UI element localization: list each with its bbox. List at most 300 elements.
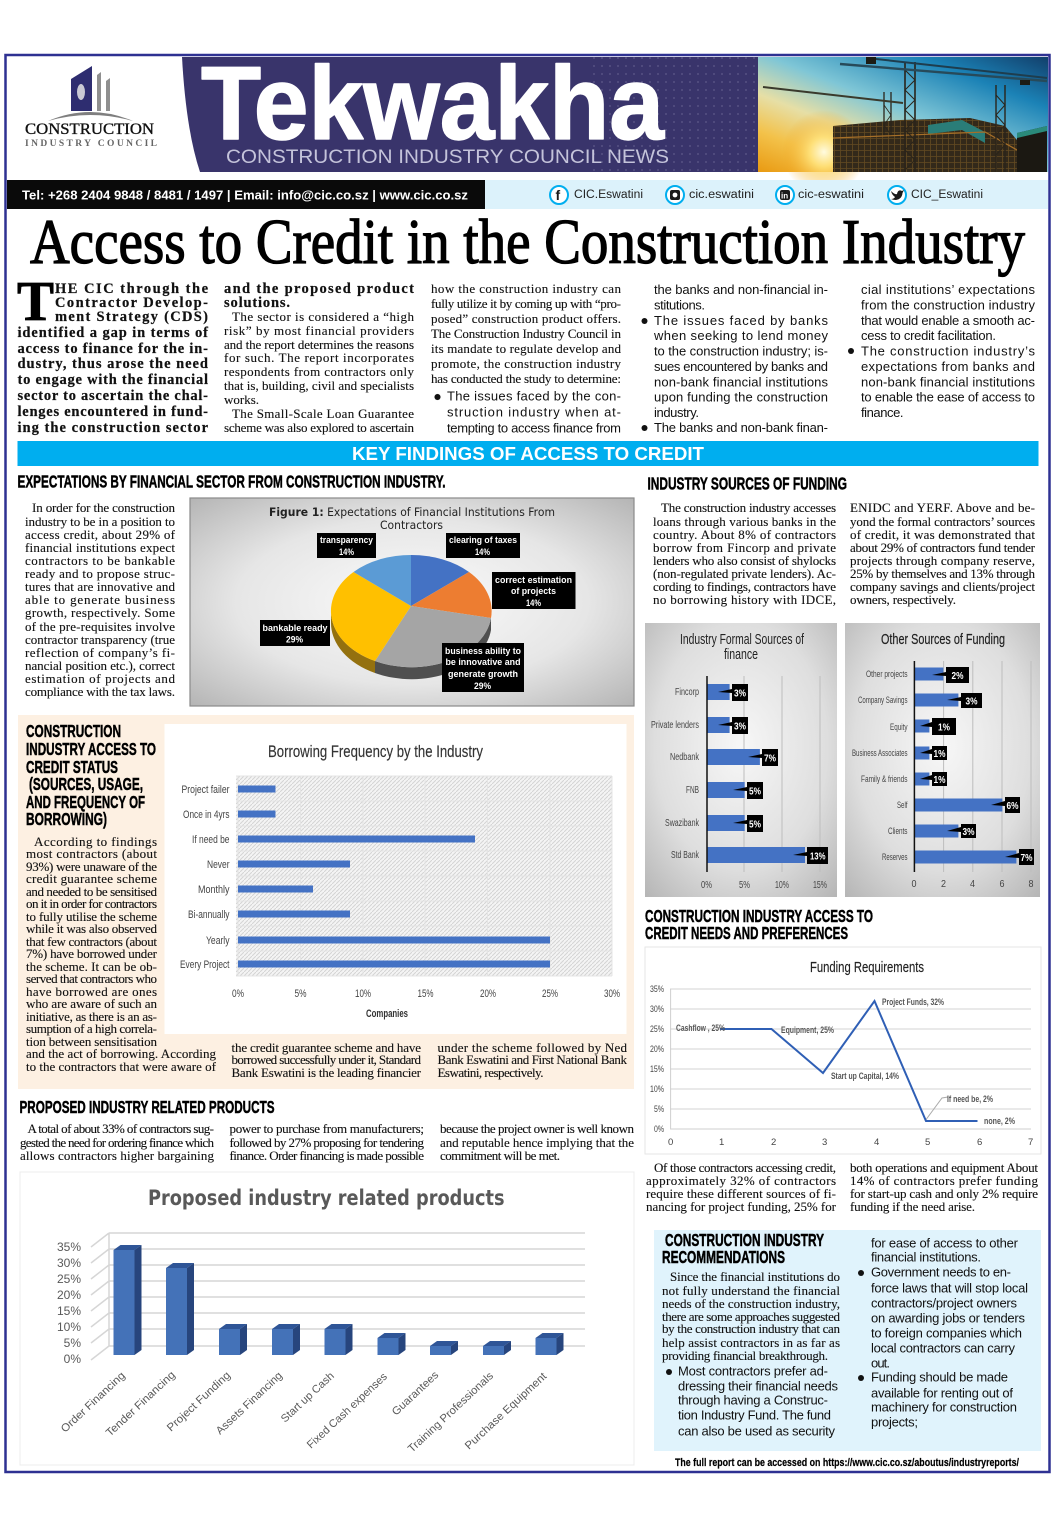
- data labels: Start up Capital, 14%: [831, 1071, 899, 1082]
- text block: 7%) have borrowed under: [26, 946, 158, 961]
- value callouts: 1%: [934, 775, 946, 786]
- category labels: Once in 4yrs: [183, 809, 230, 821]
- recommendation bullets right: to foreign companies which: [871, 1326, 1022, 1340]
- icon: instagram: [666, 186, 684, 204]
- social media bar: cic.eswatini: [689, 189, 754, 201]
- bar chart: other sources of funding: Other Sources of Funding: [881, 631, 1005, 648]
- bullet: [434, 394, 440, 400]
- text block: to the contractors that were aware of: [26, 1059, 217, 1074]
- data label: transparency: 14%: [339, 547, 354, 557]
- intro column 1: [17, 271, 209, 436]
- category labels: Tender Financing: [104, 1369, 178, 1439]
- axis labels: 30%: [604, 988, 620, 1000]
- heading: credit needs and preferences: CREDIT NEEDS AND PREFERENCES: [645, 923, 848, 943]
- intro column 4: The issues faced by banks: [654, 313, 828, 328]
- social media bar: CIC.Eswatini: [574, 189, 643, 201]
- heading: proposed industry related products: PROPOSED INDUSTRY RELATED PRODUCTS: [20, 1097, 274, 1117]
- panel: recommendations: [654, 1230, 1041, 1451]
- social media bar: cic-eswatini: [798, 189, 864, 201]
- value callouts: 6%: [1006, 801, 1019, 812]
- heading: BORROWING): [26, 809, 107, 829]
- icon: twitter: [888, 186, 906, 204]
- text block: served that contractors who: [26, 971, 157, 986]
- labels: Self: [897, 800, 908, 810]
- value callouts: 7%: [764, 754, 776, 764]
- text: proposed products: commitment will be met.: [440, 1148, 560, 1163]
- text block: under the scheme followed by Ned: [438, 1040, 628, 1055]
- intro column 4: sues encountered by banks and: [654, 359, 828, 374]
- chart title: [269, 505, 555, 532]
- text: credit needs: nancing for project funding, 25% for: [646, 1199, 837, 1214]
- y axis labels: [57, 1240, 81, 1366]
- axes labels: 35%: [650, 984, 664, 995]
- recommendation bullets left: dressing their financial needs: [678, 1378, 838, 1394]
- value callouts: 3%: [966, 696, 978, 708]
- text: expectations: contractors to be bankable: [25, 553, 175, 568]
- text: proposed products: gested the need for ordering finance which: [20, 1135, 214, 1150]
- category labels: Order Financing: [59, 1370, 128, 1435]
- category labels: Bi-annually: [188, 909, 230, 921]
- labels: Private lenders: [651, 720, 699, 731]
- labels: Business Associates: [852, 748, 908, 758]
- text: sources of funding: 25% by themselves and 13% through: [850, 566, 1036, 581]
- recommendation bullets left: Most contractors prefer ad-: [678, 1364, 828, 1378]
- bullet: [642, 425, 648, 431]
- key findings banner: KEY FINDINGS OF ACCESS TO CREDIT: [352, 444, 704, 464]
- data label: transparency: transparency: [320, 535, 373, 545]
- recommendation bullets left: [666, 1364, 838, 1438]
- intro column 3: The issues faced by the con-: [447, 388, 621, 404]
- y axis labels: 20%: [57, 1288, 81, 1302]
- text: credit needs: both operations and equipment About: [850, 1160, 1038, 1175]
- text block: not fully understand the financial: [662, 1283, 840, 1298]
- text block: credit guarantee scheme: [26, 871, 157, 886]
- category labels: Fixed Cash expenses: [305, 1370, 390, 1451]
- text block: help assist contractors in as far as: [662, 1335, 840, 1350]
- intro column 3: tempting to access finance from: [447, 420, 621, 436]
- labels: Swazibank: [665, 818, 700, 829]
- category labels: Assets Financing: [214, 1370, 285, 1437]
- intro column 3: its mandate to regulate develop and: [431, 341, 622, 356]
- text: proposed products: A total of about 33% of contractors sug-: [28, 1121, 214, 1136]
- intro column 4: the banks and non-financial in-: [654, 282, 828, 297]
- heading: CONSTRUCTION: [26, 721, 121, 741]
- intro column 4: to the construction industry; is-: [654, 344, 828, 358]
- data label: correct estimation: of projects: [511, 586, 556, 596]
- text: sources of funding: borrow from Fincorp and private: [653, 540, 836, 555]
- recommendation bullets right: available for renting out of: [871, 1386, 1013, 1400]
- value callouts: 1%: [938, 722, 950, 734]
- intro column 3: fully utilize it by coming up with “pro-: [431, 296, 621, 311]
- text block: providing financial breakthrough.: [662, 1348, 828, 1363]
- text: sources of funding: projects through company reserve,: [850, 553, 1035, 568]
- icon: facebook: f: [556, 187, 560, 203]
- labels: Clients: [888, 826, 908, 836]
- category labels: [59, 1369, 549, 1455]
- text block: to fully utilise the scheme: [26, 909, 157, 924]
- intro column 1: HE CIC through the: [55, 281, 209, 297]
- data label: clearing of taxes: clearing of taxes: [449, 535, 517, 545]
- chart title: Contractors: [380, 518, 443, 532]
- line chart: funding requirements: Funding Requirements: [810, 959, 924, 976]
- text: sources of funding: (non-regulated private lenders). Ac-: [653, 566, 836, 581]
- text: sources of funding: [653, 500, 1036, 607]
- axes labels: 1: [719, 1137, 724, 1148]
- value callouts: 7%: [1020, 853, 1033, 864]
- logo: Construction Industry Council: [25, 66, 157, 149]
- axes labels: 2: [771, 1137, 776, 1148]
- labels: 2: [941, 879, 946, 890]
- text: expectations: growth, respectively. Some: [25, 605, 175, 620]
- data label: correct estimation: correct estimation: [495, 575, 572, 585]
- logo: Construction Industry Council: CONSTRUCTION: [25, 121, 154, 138]
- recommendation bullets right: machinery for construction: [871, 1400, 1017, 1414]
- text: credit needs: [646, 1160, 1038, 1214]
- value callouts: 1%: [934, 749, 946, 760]
- axis labels: 5%: [294, 988, 307, 1000]
- social media bar: [485, 180, 1048, 209]
- intro column 5: finance.: [861, 405, 904, 420]
- text: expectations: In order for the construction: [32, 500, 176, 515]
- text block: Eswatini, respectively.: [438, 1065, 544, 1080]
- y axis labels: 15%: [57, 1304, 81, 1318]
- text: expectations: reflection of company’s fi-: [25, 645, 175, 660]
- text: credit needs: approximately 32% of contractors: [646, 1173, 836, 1188]
- data label: transparency: [317, 533, 376, 558]
- category labels: If need be: [192, 834, 230, 846]
- axis labels: 15%: [418, 988, 434, 1000]
- intro column 5: cess to credit facilitation.: [861, 328, 996, 343]
- text: proposed products: power to purchase from manufacturers;: [230, 1121, 424, 1136]
- intro column 3: struction industry when at-: [447, 404, 621, 420]
- labels: Company Savings: [858, 695, 908, 705]
- intro column 1: dustry, thus arose the need: [18, 356, 208, 372]
- intro column 2: solutions.: [224, 295, 290, 311]
- intro column 2: scheme was also explored to ascertain: [224, 420, 414, 435]
- text: sources of funding: owners, respectively.: [850, 592, 956, 607]
- logo: Construction Industry Council: INDUSTRY COUNCIL: [25, 139, 157, 149]
- labels: 15%: [813, 880, 827, 891]
- heading: industry sources of funding: INDUSTRY SOURCES OF FUNDING: [648, 474, 847, 494]
- intro column 2: that is, building, civil and specialists: [224, 378, 414, 393]
- recommendation bullets right: out.: [871, 1356, 890, 1370]
- intro column 3: [431, 281, 622, 436]
- axis labels: [232, 988, 620, 1020]
- intro column 1: access to finance for the in-: [18, 341, 208, 357]
- photo: construction cranes at sunset: [758, 57, 1048, 194]
- text block: by the construction industry that can: [662, 1321, 840, 1336]
- text: sources of funding: company savings and clients/project: [850, 579, 1035, 594]
- bar chart: industry formal sources of finance: finance: [724, 646, 758, 663]
- intro column 3: how the construction industry can: [431, 281, 622, 296]
- bar chart: industry formal sources of finance: [645, 623, 837, 897]
- heading: AND FREQUENCY OF: [26, 792, 145, 812]
- columns: [114, 1245, 564, 1355]
- data label: correct estimation: 14%: [526, 598, 541, 608]
- axes labels: [650, 984, 1033, 1148]
- category labels: Never: [207, 859, 230, 871]
- intro column 2: The Small-Scale Loan Guarantee: [232, 406, 414, 421]
- text: credit needs: Of those contractors accessing credit,: [654, 1160, 836, 1175]
- labels: 5%: [739, 880, 750, 891]
- category labels: [180, 784, 230, 971]
- heading: [662, 1230, 824, 1267]
- text: expectations: ready and to propose struc-: [25, 566, 175, 581]
- recommendation bullets right: financial institutions.: [871, 1250, 981, 1264]
- intro column 5: from the construction industry: [861, 298, 1036, 312]
- text: sources of funding: of credit, it was demonstrated that: [850, 527, 1035, 542]
- y axis labels: 5%: [64, 1336, 81, 1350]
- intro column 5: expectations from banks and: [861, 359, 1035, 374]
- axes labels: 0: [668, 1137, 673, 1148]
- recommendation bullets left: through having a Construc-: [678, 1392, 828, 1408]
- bar chart: borrowing frequency: [164, 724, 626, 1034]
- labels: 6: [1000, 879, 1005, 890]
- intro column 4: upon funding the construction: [654, 390, 828, 404]
- value callouts: 3%: [734, 688, 746, 700]
- data label: bankable ready: [260, 620, 330, 646]
- text: proposed products: allows contractors higher bargaining: [20, 1148, 214, 1163]
- axes labels: 3: [822, 1137, 827, 1148]
- category labels: Training Professionals: [406, 1370, 496, 1455]
- drop cap: T: [17, 271, 54, 333]
- heading: INDUSTRY ACCESS TO: [26, 739, 156, 759]
- data labels: Equipment, 25%: [781, 1025, 834, 1036]
- intro column 3: posed” construction product offers.: [431, 311, 621, 326]
- bars: [914, 668, 1016, 864]
- axis labels: 10%: [355, 988, 371, 1000]
- data labels: Project Funds, 32%: [882, 997, 944, 1008]
- y axis labels: 0%: [64, 1352, 81, 1366]
- bar chart: industry formal sources of finance: Industry Formal Sources of: [680, 631, 805, 648]
- data labels: Cashflow , 25%: [676, 1023, 725, 1034]
- data label: clearing of taxes: 14%: [475, 547, 490, 557]
- intro column 2: respondents from contractors only: [224, 364, 414, 379]
- category labels: Yearly: [206, 935, 230, 947]
- axes labels: 15%: [650, 1064, 664, 1075]
- data label: bankable ready: 29%: [286, 634, 303, 644]
- text block: the credit guarantee scheme and have: [232, 1040, 421, 1055]
- bullet: [642, 318, 648, 324]
- text block: that few contractors (about: [26, 934, 157, 949]
- intro column 5: [848, 282, 1036, 420]
- labels: Std Bank: [671, 850, 700, 861]
- labels: Other projects: [866, 669, 908, 679]
- intro column 2: for such. The report incorporates: [224, 350, 414, 365]
- intro column 4: when seeking to lend money: [653, 328, 828, 343]
- contact bar: [7, 180, 485, 209]
- recommendation bullets right: Government needs to en-: [871, 1264, 1011, 1280]
- labels: FNB: [686, 785, 699, 796]
- intro column 5: The construction industry’s: [861, 344, 1036, 358]
- y axis labels: 25%: [57, 1272, 81, 1286]
- value callouts: 5%: [749, 786, 761, 798]
- text: proposed products: because the project owner is well known: [440, 1121, 634, 1136]
- banner: Tekwakha nameplate: Tekwakha: [201, 46, 665, 162]
- data labels: [676, 997, 1015, 1127]
- text: credit needs: for start-up cash and only 2% require: [850, 1186, 1038, 1201]
- intro column 1: ment Strategy (CDS): [55, 309, 208, 325]
- data label: business ability: 29%: [474, 681, 491, 691]
- data labels: none, 2%: [984, 1116, 1015, 1127]
- text: credit needs: require these different sources of fi-: [646, 1186, 836, 1201]
- intro column 3: promote, the construction industry: [431, 356, 622, 371]
- text block: Bank Eswatini is the leading financier: [232, 1065, 422, 1080]
- intro column 5: that would enable a smooth ac-: [861, 313, 1035, 328]
- intro column 1: lenges encountered in fund-: [18, 404, 208, 420]
- axes labels: 25%: [650, 1024, 664, 1035]
- text block: 93%) were unaware of the: [26, 859, 157, 874]
- axes labels: 20%: [650, 1044, 664, 1055]
- bullet: [848, 348, 854, 354]
- labels: 4: [970, 879, 975, 890]
- recommendation bullets right: for ease of access to other: [871, 1236, 1019, 1250]
- text block: sumption of a high correla-: [26, 1021, 157, 1036]
- text: credit needs: 14% of contractors prefer funding: [850, 1173, 1038, 1188]
- bar chart: other sources of funding: [845, 623, 1040, 897]
- data label: business ability: generate growth: [448, 669, 518, 679]
- intro column 2: and the proposed product: [224, 281, 414, 297]
- text block: and needed to be sensitised: [26, 884, 158, 899]
- pie slices: [331, 555, 492, 679]
- category labels: Guarantees: [390, 1369, 442, 1418]
- text block: most contractors (about: [26, 846, 157, 861]
- intro column 5: non-bank financial institutions: [861, 374, 1036, 390]
- intro column 2: risk” by most financial providers: [224, 323, 414, 338]
- text: expectations: of the pre-requisites involve: [25, 619, 175, 634]
- text block: borrowed successfully under it, Standard: [232, 1052, 422, 1067]
- text: proposed products: and reputable hence implying that the: [440, 1135, 634, 1150]
- text: expectations: [25, 500, 176, 699]
- data label: business ability: business ability to: [445, 646, 521, 656]
- axes labels: 6: [977, 1137, 982, 1148]
- category labels: Start up Cash: [279, 1370, 337, 1425]
- intro column 1: to engage with the financial: [18, 372, 208, 388]
- axes labels: 30%: [650, 1004, 664, 1015]
- intro column 4: The banks and non-bank finan-: [654, 420, 828, 435]
- data label: correct estimation: [492, 572, 576, 609]
- text: expectations: financial institutions expect: [25, 540, 175, 555]
- intro column 4: stitutions.: [654, 298, 705, 312]
- bar chart: borrowing frequency: Borrowing Frequency by the Industry: [268, 742, 483, 761]
- building: [833, 118, 1017, 172]
- intro column 4: [642, 282, 828, 435]
- recommendation bullets right: [858, 1236, 1028, 1430]
- heading: credit needs and preferences: [645, 906, 873, 943]
- axes labels: 0%: [654, 1124, 664, 1135]
- category labels: Purchase Equipment: [463, 1370, 549, 1452]
- axis labels: 20%: [480, 988, 496, 1000]
- labels: 8: [1028, 879, 1034, 890]
- text block: [26, 834, 628, 1080]
- intro column 2: [224, 281, 414, 435]
- intro column 1: sector to ascertain the chal-: [18, 388, 208, 404]
- intro column 4: industry.: [654, 405, 699, 420]
- recommendation bullets right: contractors/project owners: [871, 1296, 1018, 1310]
- text: expectations: nancial position etc.), correct: [25, 658, 175, 673]
- value callouts: 13%: [810, 852, 826, 862]
- recommendation bullets right: local contractors can carry: [871, 1340, 1016, 1356]
- text block: on it in order for contractors: [26, 896, 157, 911]
- text: sources of funding: yond the formal contractors’ sources: [850, 514, 1035, 529]
- 3D column chart: proposed industry related products: Proposed industry related products: [148, 1186, 504, 1210]
- intro column 3: The Construction Industry Council in: [431, 326, 622, 341]
- heading: expectations: EXPECTATIONS BY FINANCIAL SECTOR FROM CONSTRUCTION INDUSTRY.: [18, 472, 446, 492]
- value callouts: 2%: [952, 671, 964, 682]
- heading: [26, 721, 156, 829]
- text block: there are some approaches suggested: [662, 1309, 840, 1324]
- text: sources of funding: The construction industry accesses: [661, 500, 836, 515]
- recommendation bullets right: Funding should be made: [871, 1370, 1008, 1384]
- text: sources of funding: loans through various banks in the: [653, 514, 836, 529]
- data label: business ability: [442, 643, 524, 692]
- intro column 2: works.: [224, 392, 259, 407]
- labels: 0: [912, 879, 917, 890]
- labels: [852, 669, 1034, 890]
- intro column 3: has conducted the study to determine:: [431, 371, 621, 386]
- text block: initiative, as there is an as-: [26, 1009, 157, 1024]
- data label: bankable ready: bankable ready: [262, 623, 328, 633]
- text: proposed products: [20, 1121, 634, 1163]
- recommendation bullets right: force laws that will stop local: [871, 1280, 1028, 1296]
- key findings banner: [18, 441, 1038, 466]
- value callouts: 5%: [749, 820, 761, 830]
- recommendation bullets right: on awarding jobs or tenders: [871, 1310, 1026, 1326]
- axes labels: 5: [925, 1137, 930, 1148]
- masthead: [25, 57, 1048, 180]
- text block: tion between sensitisation: [26, 1034, 158, 1049]
- labels: Fincorp: [675, 687, 699, 698]
- labels: [651, 687, 827, 891]
- axis labels: Companies: [366, 1008, 408, 1020]
- value callouts: 3%: [962, 827, 975, 838]
- axes labels: 7: [1028, 1137, 1033, 1148]
- text block: the scheme. It can be ob-: [26, 959, 157, 974]
- y axis labels: 35%: [57, 1240, 81, 1254]
- recommendation bullets left: can also be used as security: [678, 1424, 836, 1438]
- text: sources of funding: country. About 8% of contractors: [653, 527, 836, 542]
- data line: [720, 1001, 978, 1121]
- value callouts: [920, 667, 1034, 865]
- text block: [662, 1269, 840, 1363]
- text block: and the act of borrowing. According: [26, 1046, 216, 1061]
- text block: needs of the construction industry,: [662, 1296, 840, 1311]
- data label: clearing of taxes: [446, 533, 520, 558]
- gridlines: [91, 1233, 585, 1360]
- labels: Equity: [890, 722, 908, 732]
- text block: while it was also observed: [26, 921, 158, 936]
- icon: linkedin: [776, 186, 794, 204]
- recommendation bullets left: tion Industry Fund. The fund: [678, 1408, 831, 1422]
- chart title: Figure 1: Expectations of Financial Institutions From: [269, 505, 555, 519]
- heading: (SOURCES, USAGE,: [29, 774, 143, 794]
- axis labels: 25%: [542, 988, 558, 1000]
- labels: 10%: [775, 880, 789, 891]
- bars: [238, 786, 550, 968]
- text: expectations: tures that are innovative and: [25, 579, 176, 594]
- heading: CONSTRUCTION INDUSTRY: [665, 1230, 824, 1250]
- text: expectations: estimation of projects and: [25, 671, 176, 686]
- text block: have borrowed are ones: [26, 984, 157, 999]
- text: expectations: contractor transparency (true: [25, 632, 175, 647]
- intro column 5: to enable the ease of access to: [861, 390, 1035, 404]
- category labels: Project failer: [182, 784, 230, 796]
- text block: Bank Eswatini and First National Bank: [438, 1052, 628, 1067]
- contact bar: Tel: +268 2404 9848 / 8481 / 1497 | Email: info@cic.co.sz | www.cic.co.sz: [22, 188, 468, 202]
- text: sources of funding: lenders who also consist of shylocks: [653, 553, 836, 568]
- heading: RECOMMENDATIONS: [662, 1247, 785, 1267]
- intro column 4: non-bank financial institutions: [654, 374, 828, 390]
